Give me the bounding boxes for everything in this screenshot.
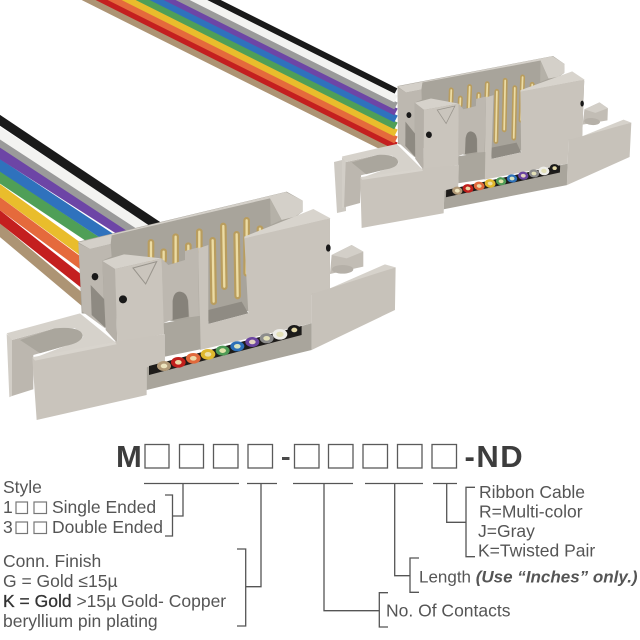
ribbon cable: lower left connector: [0, 117, 158, 306]
style options: 1: [3, 497, 13, 517]
segment underlines and brackets: [144, 484, 475, 627]
connector: upper right: [334, 42, 634, 246]
length note: Length (Use “Inches” only.): [419, 568, 638, 587]
connector finish options: beryllium pin plating: [3, 611, 158, 631]
ribbon cable options: R=Multi-color: [479, 502, 583, 522]
number of contacts: No. Of Contacts: [386, 601, 511, 621]
connector: lower left: [7, 192, 396, 420]
connector finish options: [3, 551, 226, 631]
style options: Single Ended: [52, 497, 156, 517]
part number code: -ND: [464, 439, 524, 474]
connector finish options: Conn. Finish: [3, 551, 101, 571]
connector finish options: G = Gold ≤15µ: [3, 571, 118, 591]
part number code: M: [116, 439, 142, 474]
style options: 3: [3, 517, 13, 537]
connector finish options: K = Gold >15µ Gold- Copper: [3, 591, 226, 611]
ribbon cable: upper right connector: [80, 0, 396, 153]
ribbon cable options: [478, 482, 595, 560]
part number code: [116, 439, 524, 474]
ribbon cable options: J=Gray: [478, 521, 535, 541]
style options: Double Ended: [52, 517, 163, 537]
ribbon cable options: K=Twisted Pair: [478, 540, 595, 560]
style options: [3, 477, 163, 537]
ribbon cable options: Ribbon Cable: [479, 482, 585, 502]
style options: Style: [3, 477, 42, 497]
